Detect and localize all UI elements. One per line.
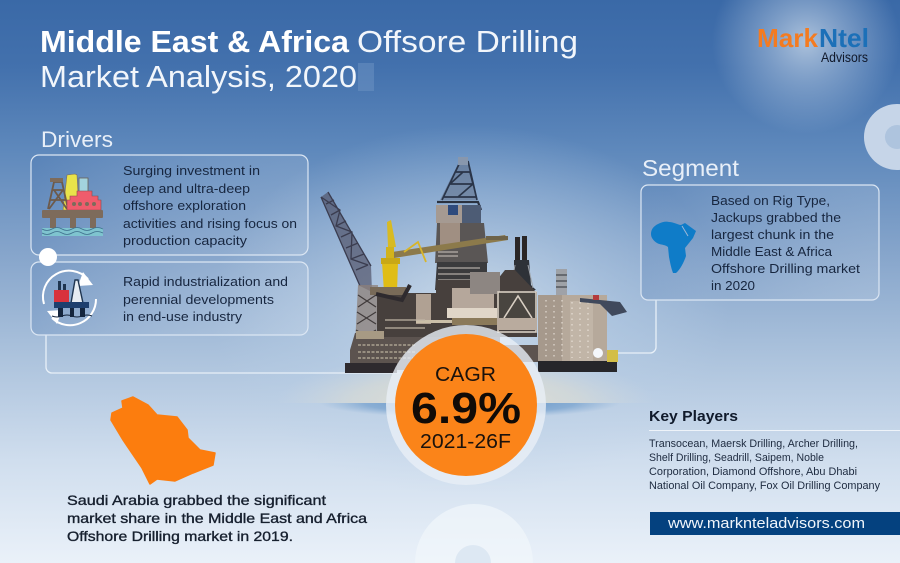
- callout: CAGR: 2021-26F: [420, 431, 511, 453]
- panel: driver 2: [31, 262, 308, 335]
- text: Key Players list: Transocean, Maersk Drilling, Archer Drilling,: [649, 438, 858, 450]
- yellow column: [387, 220, 396, 247]
- title: [40, 24, 578, 94]
- crane: [321, 192, 372, 292]
- text: driver 1: Surging investment in: [123, 163, 260, 178]
- text: segment: in 2020: [711, 278, 755, 293]
- website bar: [650, 512, 900, 535]
- text: driver 1: activities and rising focus on: [123, 216, 297, 231]
- text: segment: Offshore Drilling market: [711, 261, 860, 276]
- heading: Drivers: Drivers: [41, 127, 113, 152]
- text: Saudi Arabia: Saudi Arabia grabbed the significant: [67, 492, 326, 508]
- small tower: [556, 269, 567, 295]
- connector dot: drivers: [39, 248, 57, 266]
- text: driver 2: [123, 274, 288, 324]
- main deck: [377, 270, 537, 337]
- text: segment: largest chunk in the: [711, 227, 834, 242]
- text: Saudi Arabia: Offshore Drilling market in 2019.: [67, 528, 293, 544]
- title: Offsore Drilling: [357, 24, 578, 59]
- panel: segment: [641, 185, 879, 300]
- accommodation block: [538, 295, 607, 361]
- text: driver 2: Rapid industrialization and: [123, 274, 288, 289]
- panel: driver 1: [31, 155, 308, 255]
- icon: rig with cycle arrows: [43, 271, 96, 325]
- website bar: www.marknteladvisors.com: [667, 515, 865, 532]
- logo: MarkNtel Advisors: Ntel: [819, 23, 869, 53]
- crane base lattice: [354, 285, 378, 365]
- text: segment: Jackups grabbed the: [711, 210, 841, 225]
- map: Saudi Arabia: [111, 397, 215, 484]
- text: segment: [711, 193, 860, 293]
- derrick: [440, 158, 477, 200]
- text: Saudi Arabia: market share in the Middle East and Africa: [67, 510, 367, 526]
- boom: [392, 235, 508, 258]
- helideck: [580, 298, 627, 316]
- lower decks: [350, 333, 540, 370]
- icon: offshore platform: [42, 174, 103, 236]
- text: driver 1: deep and ultra-deep: [123, 181, 250, 196]
- text: Saudi Arabia: [67, 492, 367, 544]
- connector dot: segment: [593, 348, 603, 358]
- logo: MarkNtel Advisors: Advisors: [821, 49, 868, 65]
- text: driver 2: in end-use industry: [123, 309, 243, 324]
- text: driver 2: perennial developments: [123, 292, 275, 307]
- logo: MarkNtel Advisors: Mark: [757, 23, 819, 53]
- decorative circle: right edge: [864, 104, 900, 170]
- text: Key Players list: National Oil Company, Fox Oil Drilling Company: [649, 480, 880, 492]
- tower block: [436, 205, 480, 223]
- icon: Africa and Middle East map: [651, 222, 696, 273]
- text: Key Players list: Shelf Drilling, Seadrill, Saipem, Noble: [649, 452, 824, 464]
- text: driver 1: production capacity: [123, 233, 248, 248]
- connector: drivers to rig: [46, 335, 400, 373]
- lower hull: [538, 361, 617, 372]
- title: Market Analysis, 2020: [40, 59, 357, 94]
- smoke stacks: [515, 237, 520, 267]
- text: Key Players list: [649, 438, 880, 492]
- heading: Segment: Segment: [642, 155, 740, 181]
- text: segment: Based on Rig Type,: [711, 193, 830, 208]
- text: driver 1: offshore exploration: [123, 198, 246, 213]
- callout: CAGR: [386, 325, 546, 485]
- connector: segment to rig: [598, 300, 656, 353]
- title: Middle East & Africa: [40, 24, 350, 59]
- text: driver 1: [123, 163, 297, 248]
- oil rig illustration: [321, 157, 627, 373]
- heading: Key Players: Key Players: [649, 408, 738, 425]
- text: segment: Middle East & Africa: [711, 244, 833, 259]
- text: Key Players list: Corporation, Diamond Offshore, Abu Dhabi: [649, 466, 857, 478]
- callout: CAGR: 6.9%: [411, 384, 521, 433]
- callout: CAGR: CAGR: [435, 364, 496, 386]
- logo: MarkNtel Advisors: [757, 23, 869, 65]
- decorative circle: bottom: [415, 504, 533, 563]
